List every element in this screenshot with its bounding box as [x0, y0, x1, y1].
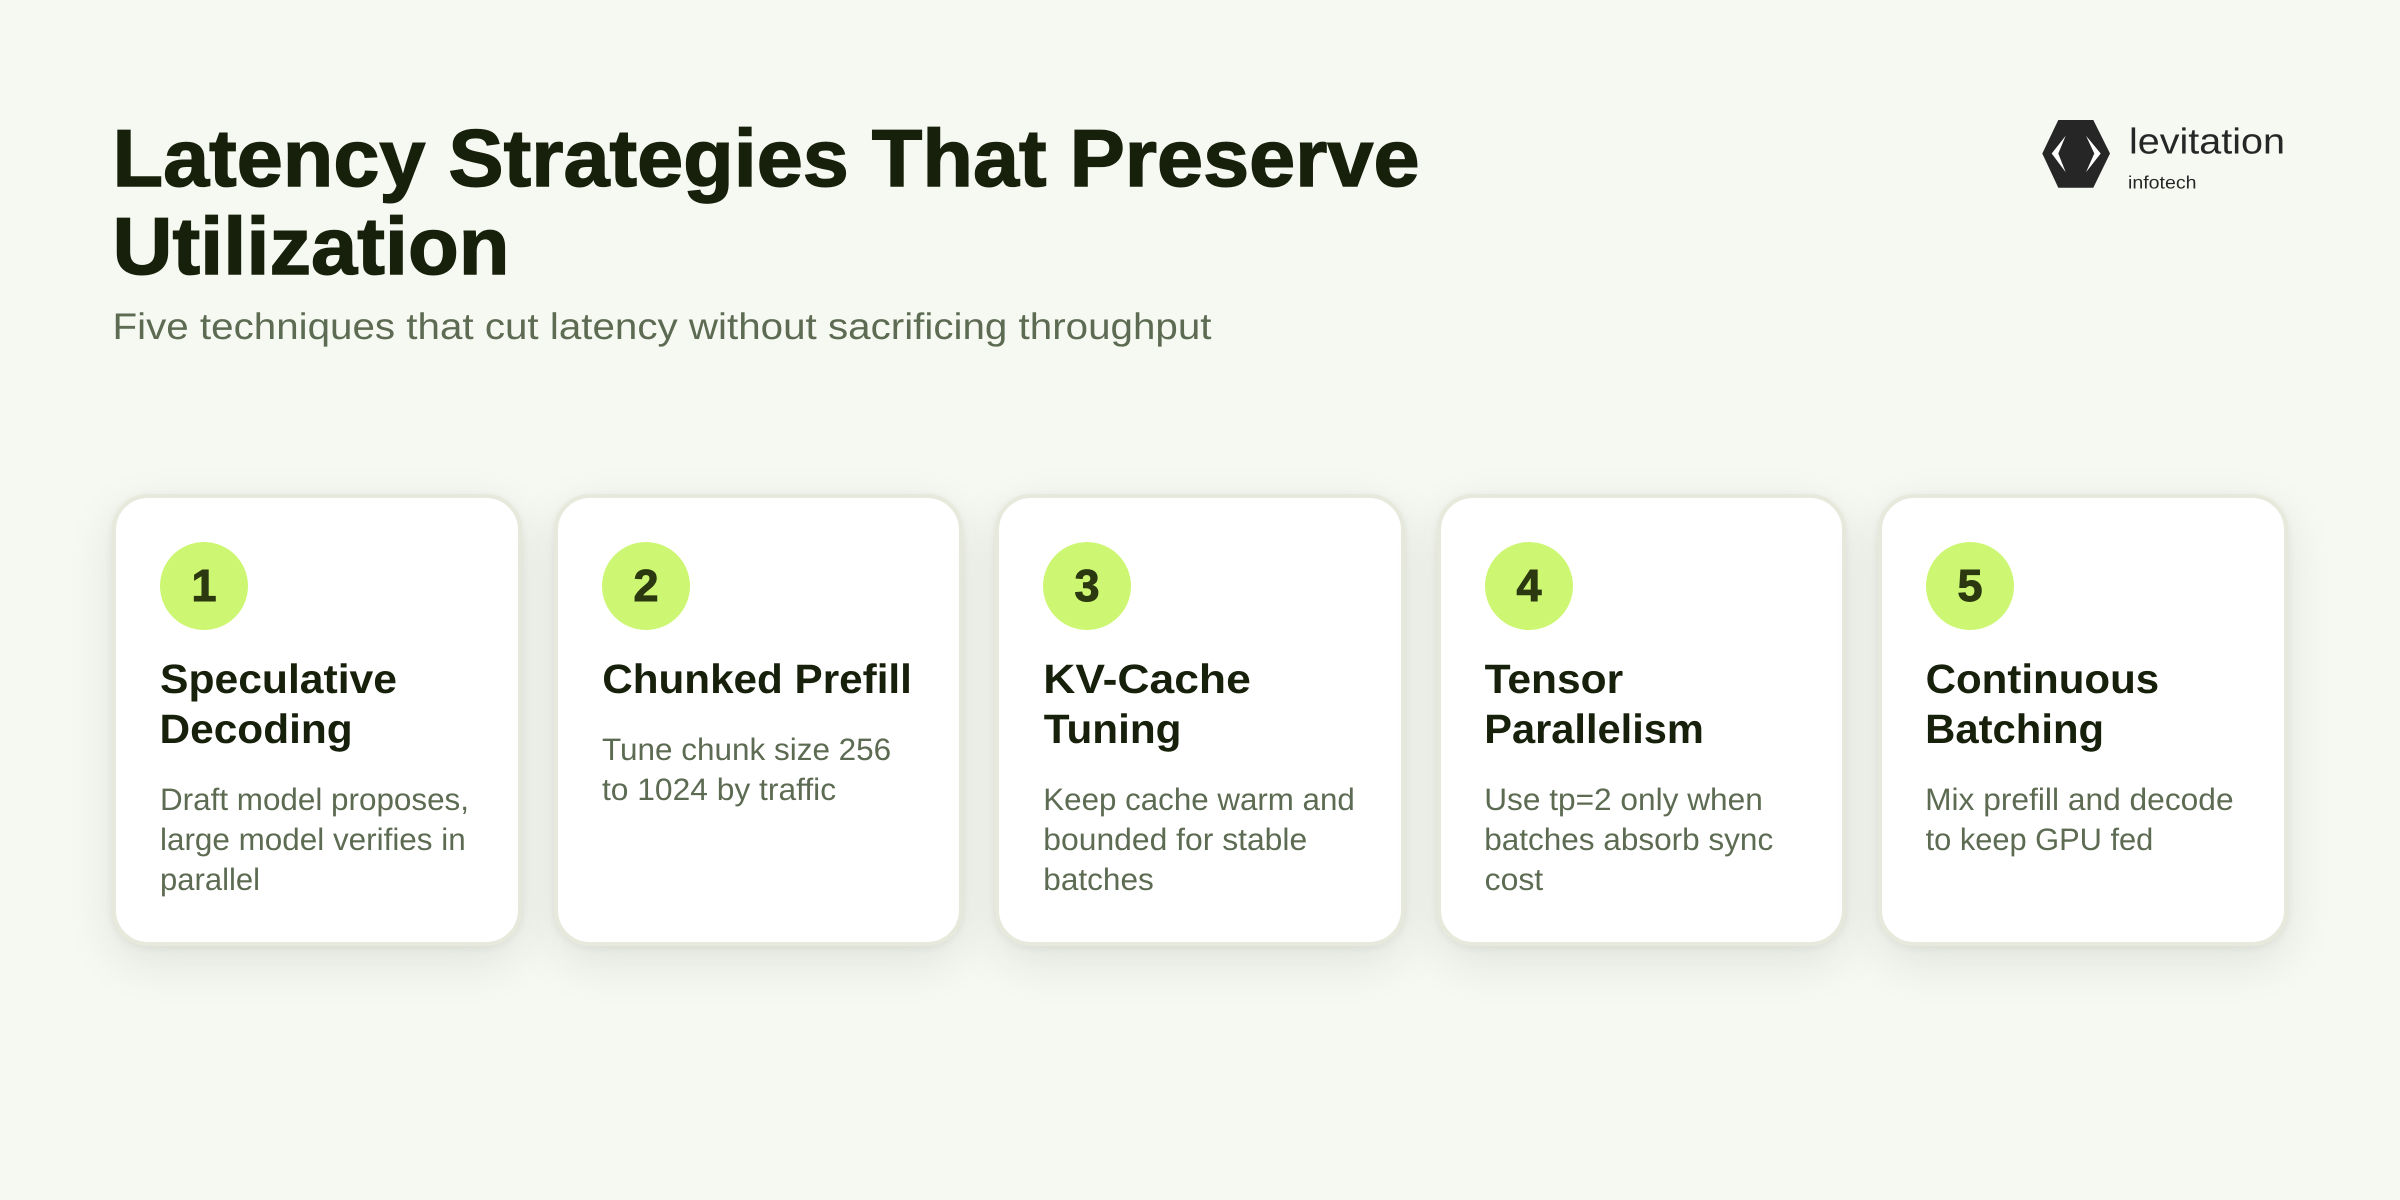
heading: continuous batching: Batching: [1925, 706, 2104, 752]
heading: continuous batching: [1925, 656, 2160, 752]
description: parallel: [160, 862, 260, 897]
panel: card 2 chunked prefill: [554, 494, 963, 946]
heading: kv-cache tuning: Tuning: [1044, 706, 1182, 752]
number badge 4: [1485, 542, 1573, 630]
description: large model verifies in: [160, 822, 466, 857]
description: Mix prefill and decode: [1925, 782, 2234, 817]
heading: speculative decoding: [159, 656, 397, 752]
heading: speculative decoding: Speculative: [160, 656, 397, 702]
logo wordmark: levitation: [2129, 120, 2285, 161]
description: [602, 732, 891, 807]
description: [1925, 782, 2234, 857]
heading: chunked prefill: Chunked Prefill: [602, 656, 911, 702]
number badge 2: [602, 542, 690, 630]
header: title and subtitle: [112, 114, 1420, 347]
heading: continuous batching: Continuous: [1926, 656, 2160, 702]
number badge 2: 2: [633, 560, 658, 611]
title: Utilization: [112, 202, 510, 292]
heading: kv-cache tuning: [1043, 656, 1251, 752]
panel: card 1 speculative decoding: [112, 494, 522, 946]
description: Keep cache warm and: [1043, 782, 1355, 817]
panel: card 4 tensor parallelism: [1437, 494, 1846, 946]
panel: card 5 continuous batching: [1878, 494, 2288, 946]
description: batches absorb sync: [1484, 822, 1773, 857]
logo: levitation infotech: [2042, 120, 2285, 193]
description: [1043, 782, 1355, 897]
number badge 5: 5: [1958, 560, 1983, 611]
heading: tensor parallelism: [1484, 656, 1704, 752]
number badge 4: 4: [1516, 560, 1541, 611]
description: [1484, 782, 1773, 897]
icon: hexagon with chevrons: [2042, 120, 2110, 188]
heading: tensor parallelism: Tensor: [1484, 656, 1623, 702]
description: Tune chunk size 256: [602, 732, 891, 767]
title: [112, 114, 1420, 292]
description: bounded for stable: [1043, 822, 1307, 857]
heading: tensor parallelism: Parallelism: [1484, 706, 1704, 752]
description: cost: [1484, 862, 1543, 897]
number badge 3: [1043, 542, 1131, 630]
number badge 3: 3: [1075, 560, 1100, 611]
number badge 5: [1926, 542, 2014, 630]
subtitle: Five techniques that cut latency without sacrificing throughput: [112, 306, 1212, 347]
title: Latency Strategies That Preserve: [112, 114, 1420, 204]
description: Use tp=2 only when: [1484, 782, 1763, 817]
heading: speculative decoding: Decoding: [159, 706, 353, 752]
logo sub-wordmark: infotech: [2128, 173, 2196, 193]
description: Draft model proposes,: [160, 782, 469, 817]
description: to 1024 by traffic: [602, 772, 836, 807]
description: to keep GPU fed: [1926, 822, 2154, 857]
heading: kv-cache tuning: KV-Cache: [1043, 656, 1251, 702]
panel: card 3 kv-cache tuning: [995, 494, 1405, 946]
number badge 1: [160, 542, 248, 630]
number badge 1: 1: [191, 560, 217, 611]
description: [160, 782, 469, 897]
description: batches: [1043, 862, 1154, 897]
